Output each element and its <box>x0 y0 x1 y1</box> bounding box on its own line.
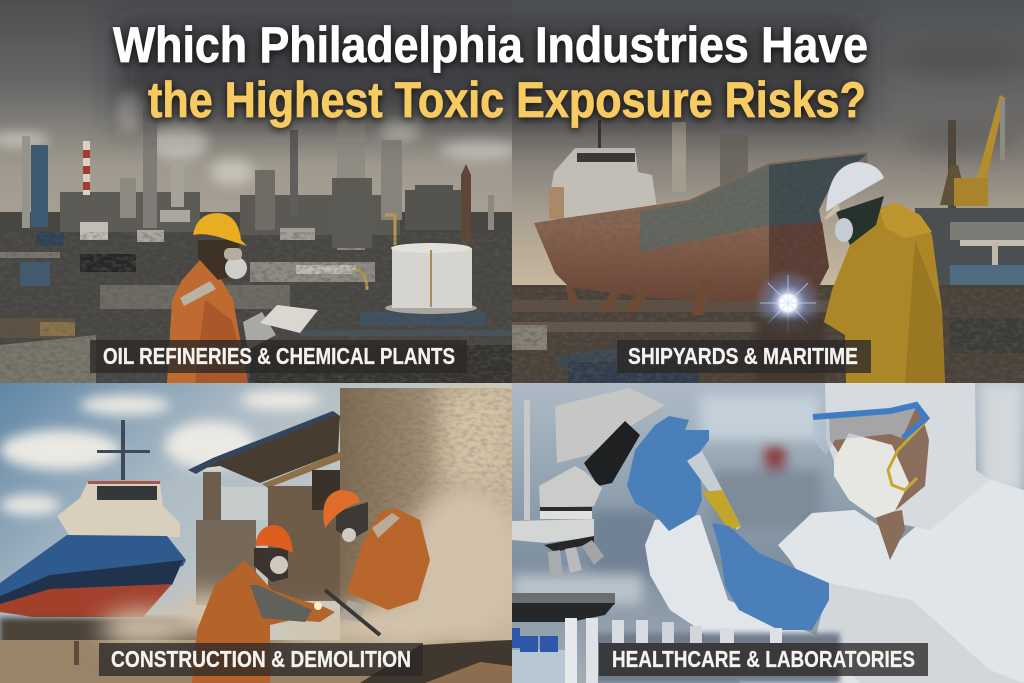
safety goggles <box>813 403 926 455</box>
lower blue glove <box>712 523 829 630</box>
label: shipyards and maritime <box>617 340 871 373</box>
protective suit <box>645 475 1024 683</box>
label: healthcare and laboratories: HEALTHCARE & LABORATORIES <box>612 646 915 672</box>
title <box>113 17 868 128</box>
ship on slipway <box>0 420 186 617</box>
title shadow band <box>115 22 865 127</box>
label: healthcare and laboratories <box>599 643 928 676</box>
ruined building <box>188 385 512 648</box>
sample vials <box>512 618 840 683</box>
face <box>829 408 929 511</box>
panel: shipyards and maritime <box>512 0 1024 383</box>
title line 2: the Highest Toxic Exposure Risks? <box>148 72 866 128</box>
label: construction and demolition: CONSTRUCTION & DEMOLITION <box>111 646 411 672</box>
test tube with yellow liquid <box>687 451 741 530</box>
ground <box>0 640 512 683</box>
welding spark <box>756 270 820 332</box>
label: oil refineries and chemical plants <box>90 340 467 373</box>
hood <box>825 383 990 530</box>
panel: construction and demolition <box>0 383 525 683</box>
worker with orange helmet, left <box>192 525 335 683</box>
welder in yellow jacket <box>824 162 945 383</box>
storage tank <box>385 243 477 314</box>
panel: oil refineries and chemical plants <box>0 0 520 383</box>
microscope <box>512 388 665 622</box>
ship superstructure <box>549 120 748 220</box>
worker with orange helmet, right <box>323 490 430 635</box>
upper blue glove <box>627 416 709 531</box>
label: shipyards and maritime: SHIPYARDS & MARITIME <box>628 343 858 369</box>
face mask <box>834 420 927 518</box>
background crane and yard <box>915 95 1024 285</box>
title line 1: Which Philadelphia Industries Have <box>113 17 868 73</box>
worker in orange coveralls <box>167 213 318 383</box>
label: construction and demolition <box>99 643 423 676</box>
rubble <box>360 640 512 683</box>
panel: healthcare and laboratories <box>512 383 1024 683</box>
refinery plant mass <box>0 108 512 383</box>
dust clouds <box>100 485 525 653</box>
label: oil refineries and chemical plants: OIL REFINERIES & CHEMICAL PLANTS <box>103 343 455 369</box>
rusting ship hull <box>534 152 868 315</box>
